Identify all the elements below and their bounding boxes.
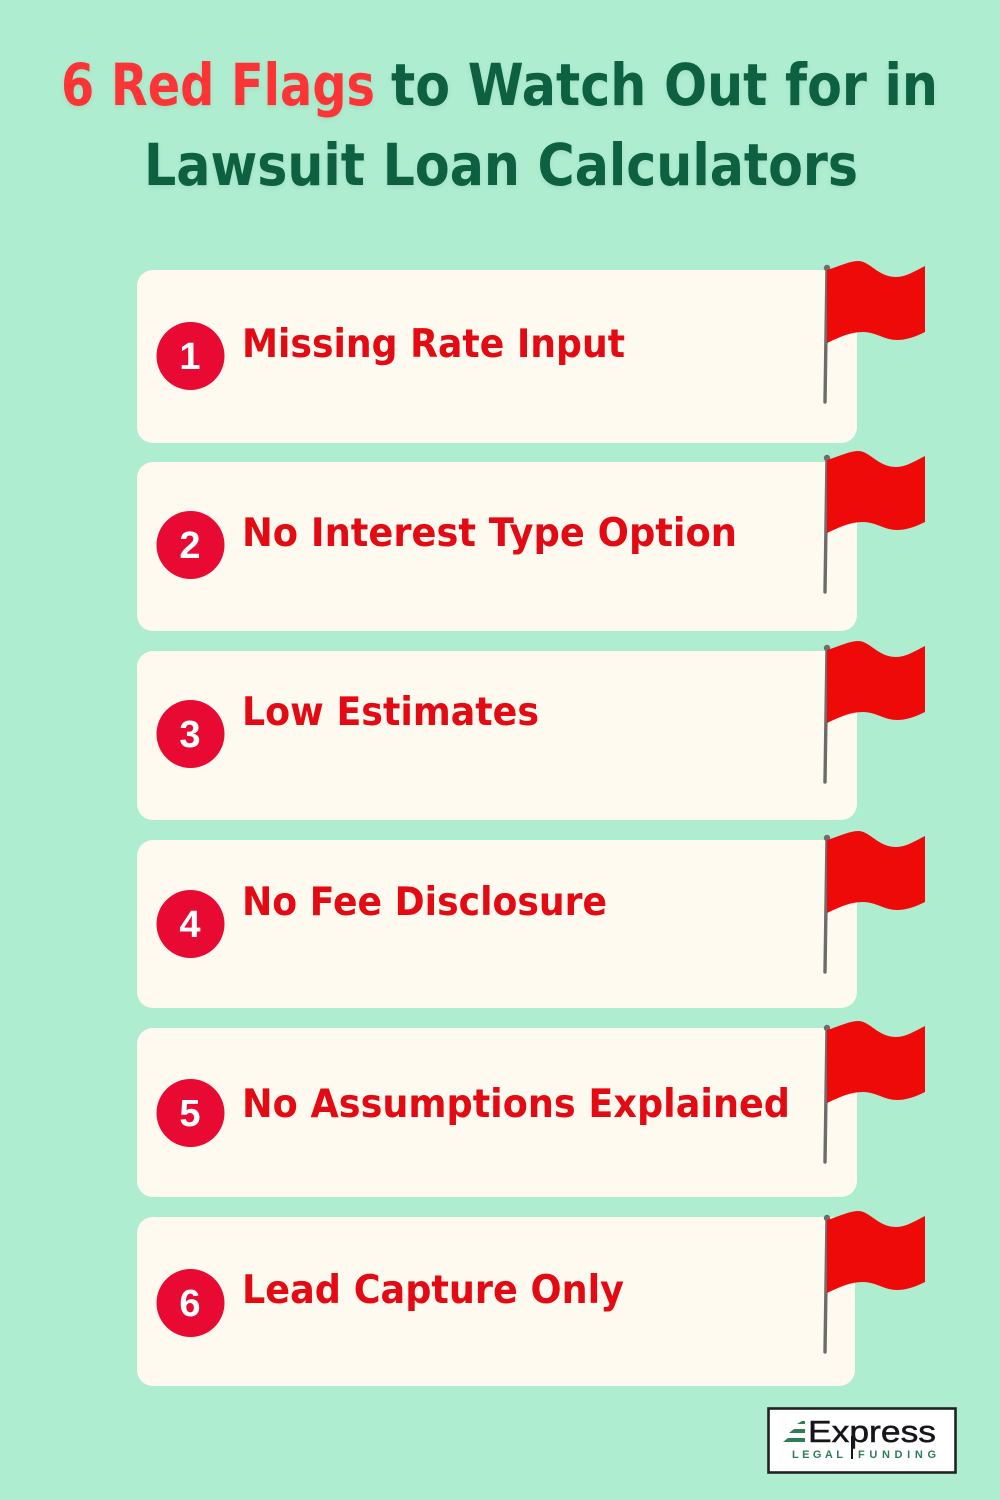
logo: Express Legal Funding: Express [808,1414,936,1449]
number badge 4 [156,890,224,958]
heading: Low Estimates: Low Estimates [242,689,539,735]
heading: No Interest Type Option: No Interest Type Option [242,510,737,556]
icon: red flag 3 [824,641,925,782]
number badge 3 [156,700,224,768]
panel: item 6 [137,1211,925,1386]
panel: item 5 [137,1021,925,1197]
icon: red flag 2 [824,451,925,592]
heading: No Assumptions Explained: No Assumptions Explained [242,1081,790,1127]
logo: Express Legal Funding: LEGAL [792,1449,843,1461]
panel: item 2 [137,451,925,631]
panel: item 3 [137,641,925,820]
title: Lawsuit Loan Calculators [144,131,858,199]
number badge 5 [156,1079,224,1147]
panel: item 1 [137,261,925,443]
number badge 2 [156,511,224,579]
icon: red flag 1 [824,261,925,402]
number badge 2: 2 [179,525,201,567]
logo: Express Legal Funding [768,1408,956,1472]
number badge 3: 3 [179,714,201,756]
title [61,51,938,199]
number badge 6: 6 [179,1283,201,1325]
icon: logo stripes [783,1421,805,1442]
title: 6 Red Flags [61,51,375,119]
icon: red flag 6 [824,1211,925,1352]
title: to Watch Out for in [391,51,938,119]
heading: No Fee Disclosure: No Fee Disclosure [242,879,607,925]
number badge 5: 5 [179,1093,201,1135]
number badge 4: 4 [179,904,201,946]
logo: Express Legal Funding: FUNDING [858,1449,936,1461]
icon: red flag 5 [824,1021,925,1162]
heading: Missing Rate Input: Missing Rate Input [242,321,625,367]
number badge 6 [156,1269,224,1337]
number badge 1: 1 [179,336,201,378]
heading: Lead Capture Only: Lead Capture Only [242,1267,624,1313]
panel: item 4 [137,831,925,1008]
icon: red flag 4 [824,831,925,972]
number badge 1 [156,322,224,390]
